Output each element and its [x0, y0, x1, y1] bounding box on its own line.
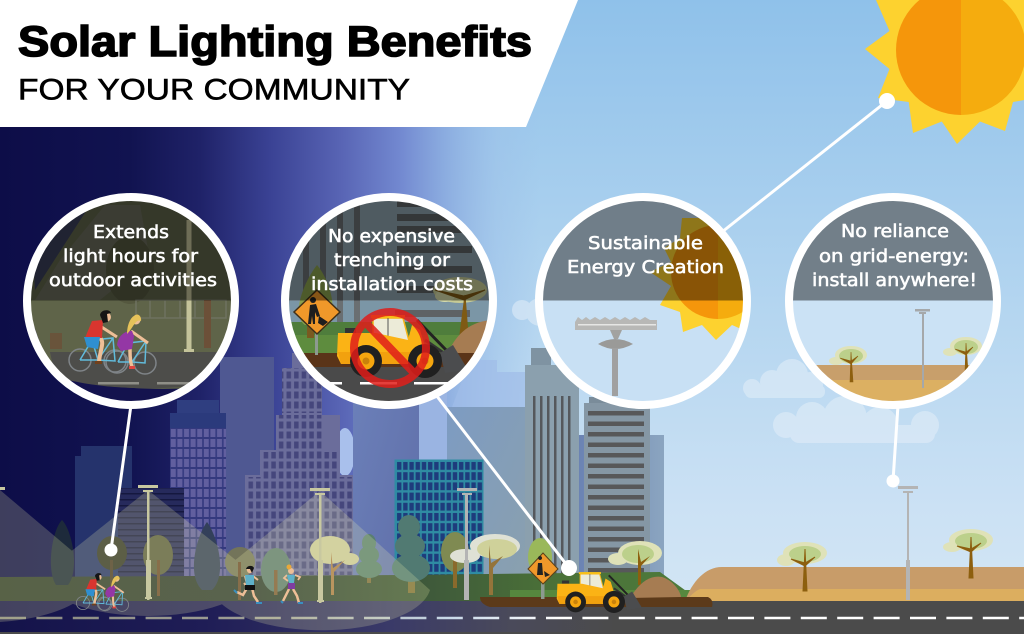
round trees: [97, 532, 552, 600]
no symbol: [354, 312, 426, 384]
small cyclists: [76, 573, 129, 611]
dark building: [118, 488, 184, 578]
text: no grid reliance: [812, 222, 977, 291]
circle ring: [539, 197, 747, 405]
solar lamp close-up: [575, 317, 657, 396]
construction dirt and mound: [480, 577, 712, 607]
left tree: [829, 346, 867, 382]
banded tower: [584, 397, 650, 580]
panel: no trenching costs: [283, 195, 495, 407]
text: sustainable energy: [567, 234, 724, 278]
circle ring: [285, 197, 493, 405]
lamp: [915, 309, 930, 388]
far buildings: [75, 340, 664, 601]
subtitle: FOR YOUR COMMUNITY: [18, 74, 410, 106]
runners: [234, 564, 303, 603]
clouds: [512, 298, 939, 443]
text: extends light hours: [49, 223, 217, 291]
acacia trees: [310, 529, 993, 595]
stepped tower: [245, 353, 353, 578]
title: Solar Lighting Benefits: [18, 18, 532, 66]
sun: [865, 0, 1024, 144]
runner: man: [234, 566, 262, 603]
text band overlay: [543, 201, 743, 300]
text band overlay: [793, 201, 993, 300]
text: sustainable energy: Sustainable: [588, 234, 703, 254]
trees: [51, 515, 993, 600]
title banner: [0, 0, 578, 127]
loader: [337, 315, 468, 378]
text: extends light hours: Extends: [93, 223, 169, 243]
text: no trenching: [311, 227, 473, 295]
text: no trenching: trenching or: [334, 251, 451, 271]
connector: lamp to circle: [886, 405, 900, 488]
text: extends light hours: light hours for: [63, 247, 199, 267]
blue glass building: [395, 460, 483, 576]
road sign: [294, 290, 340, 355]
connector: loader to circle: [436, 395, 577, 576]
connector: cyclists to circle: [104, 405, 131, 556]
big cyclists: [69, 310, 156, 374]
sun close-up: [651, 218, 743, 340]
panel: sustainable energy: [537, 195, 765, 405]
small road sign: [528, 553, 558, 599]
right tree: [943, 337, 982, 371]
text: sustainable energy: Energy Creation: [567, 258, 724, 278]
street lamps: [0, 485, 918, 603]
text: no trenching: No expensive: [328, 227, 455, 247]
text: extends light hours: outdoor activities: [49, 271, 217, 291]
panel: no grid reliance: [787, 195, 999, 405]
road: [0, 601, 1024, 634]
text: no trenching: installation costs: [311, 275, 473, 295]
ground and desert: [0, 567, 1024, 601]
striped tower: [525, 348, 579, 580]
pines: [51, 515, 430, 593]
text: no grid reliance: install anywhere!: [812, 271, 977, 291]
text band overlay: [289, 201, 489, 300]
connector: sun to circle: [722, 93, 895, 232]
runner: woman: [281, 564, 303, 603]
circle ring: [27, 197, 235, 405]
light cones: [0, 490, 430, 630]
text: no grid reliance: No reliance: [841, 222, 949, 242]
text: no grid reliance: on grid-energy:: [819, 247, 969, 267]
city skyline: [75, 340, 664, 601]
tall grid building: [170, 400, 226, 576]
small loader: [557, 572, 642, 613]
circle ring: [789, 197, 997, 405]
panel: extends light hours: [25, 195, 240, 405]
text band overlay: [31, 201, 231, 300]
